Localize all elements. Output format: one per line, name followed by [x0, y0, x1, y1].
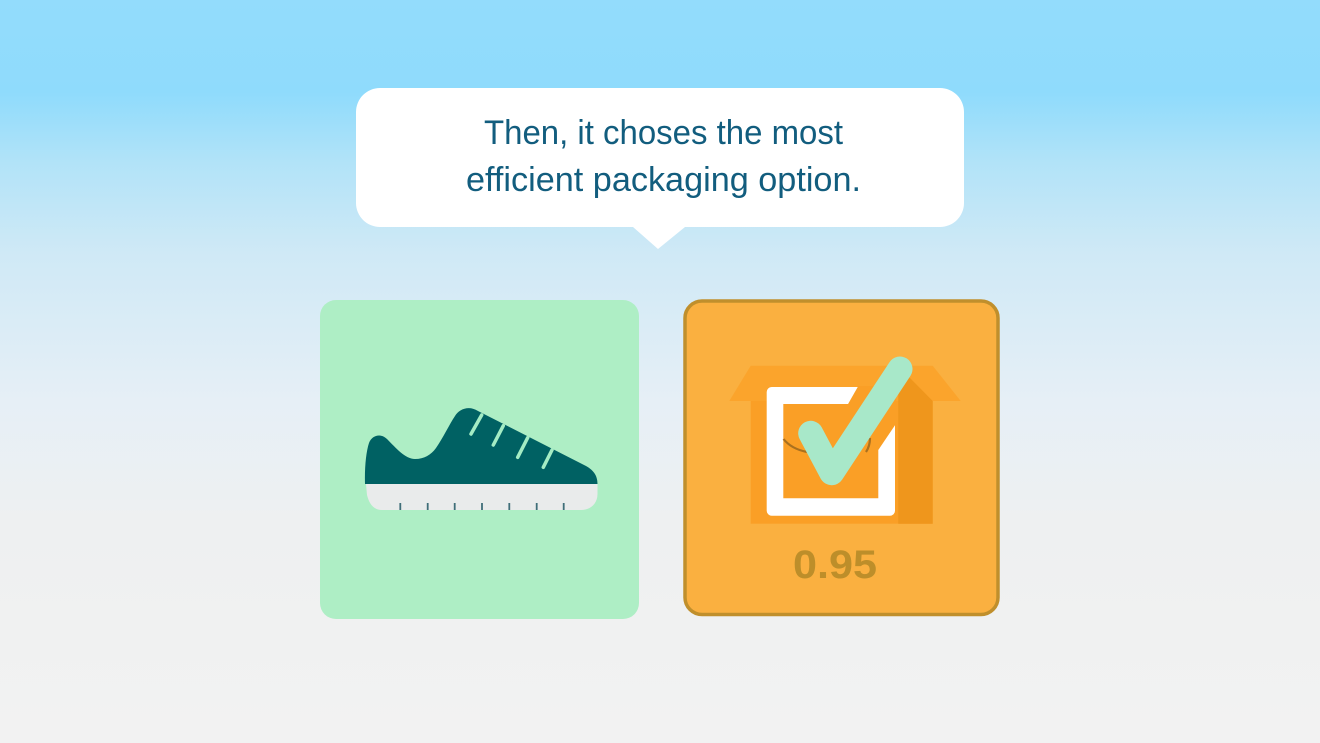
bubble text: efficient packaging option.	[466, 161, 861, 199]
card background	[320, 300, 639, 619]
checkbox gap	[848, 386, 896, 450]
box side	[898, 376, 933, 524]
bubble text: Then, it choses the most	[484, 114, 844, 152]
amazon smile	[784, 438, 870, 452]
sole ticks	[400, 503, 564, 510]
shoe sole	[366, 484, 598, 510]
bubble text	[466, 114, 861, 199]
shoe laces	[471, 415, 552, 467]
icon: shoe	[365, 408, 598, 510]
bubble shape with tail	[356, 88, 964, 249]
panel: shoe card	[320, 300, 639, 619]
green checkmark	[811, 369, 900, 473]
icon: cardboard box with checkmark	[729, 366, 961, 524]
score value: 0.95	[793, 543, 877, 587]
shoe upper	[365, 408, 598, 484]
white checkbox frame	[767, 387, 895, 516]
box front	[751, 401, 933, 524]
box flaps	[729, 366, 961, 401]
panel: packaging option card	[685, 301, 998, 614]
speech bubble callout	[356, 88, 964, 249]
card background	[685, 301, 998, 614]
